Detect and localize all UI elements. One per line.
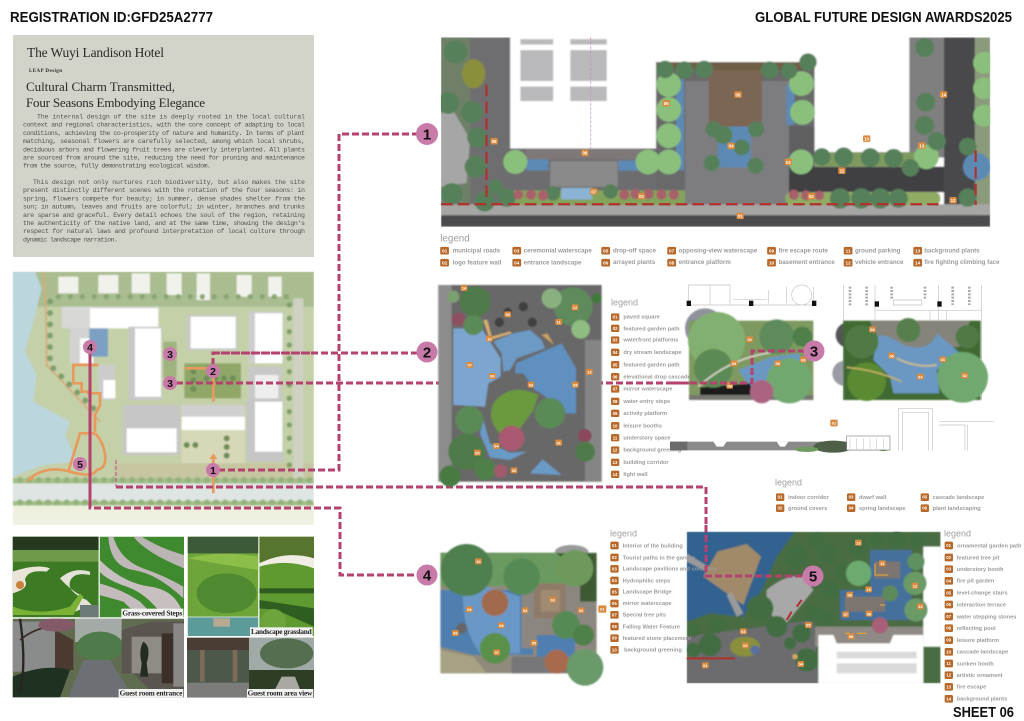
markers: plan 5 numbers xyxy=(702,540,924,668)
markers: plan 3 numbers: 06 xyxy=(889,353,895,358)
route: orange path xyxy=(30,365,213,493)
legend: plan 1: 07 xyxy=(669,248,675,254)
legend: plan 2: 02 xyxy=(613,326,618,331)
legend: plan 2: leisure booths xyxy=(623,423,662,429)
legend: plan 4: 08 xyxy=(612,624,617,629)
legend: plan 1: entrance landscape xyxy=(524,260,582,267)
legend: plan 5: 09 xyxy=(946,638,952,643)
markers: plan 5 numbers: 03 xyxy=(741,629,746,634)
markers: plan 3 numbers: 02 xyxy=(747,337,753,342)
markers: plan 2 numbers: 12 xyxy=(573,305,578,310)
markers: plan 1 numbers: 10 xyxy=(864,136,870,141)
legend: plan 2: 10 xyxy=(613,423,618,428)
legend: plan 4: featured stone placement xyxy=(623,636,691,642)
markers: plan 5 numbers: 09 xyxy=(847,592,853,597)
legend: plan 5 xyxy=(944,529,1022,703)
legend: plan 4: 10 xyxy=(612,647,617,652)
markers: plan 2 numbers: 01 xyxy=(556,440,562,445)
photo: landscape grassland xyxy=(259,537,314,636)
legend: plan 4: 02 xyxy=(612,555,617,560)
markers: plan 4 numbers: 01 xyxy=(600,607,605,612)
panel: project description: are sparse and graceful. Every detail echoes the soul of the region, retaining xyxy=(23,212,305,219)
callout: site plan 4: 4 xyxy=(87,342,93,354)
legend: plan 1: logo feature wall xyxy=(453,260,502,267)
connector overlay across plan 5 xyxy=(706,525,808,576)
panel: project description: The Wuyi Landison Hotel xyxy=(27,45,164,60)
legend: plan 1: arrayed plants xyxy=(613,259,656,266)
legend: plan 1: 11 xyxy=(846,248,851,254)
legend: plan 5: legend xyxy=(944,529,971,539)
callout: site plan 1 xyxy=(206,463,220,477)
legend: plan 1: 13 xyxy=(915,248,921,254)
markers: plan 1 numbers: 02 xyxy=(809,194,814,199)
legend: plan 5: artistic ornament xyxy=(957,673,1003,679)
legend: plan 3: indoor corridor xyxy=(788,495,830,501)
legend: plan 1: fire escape route xyxy=(778,248,829,255)
legend: plan 5: 01 xyxy=(946,543,952,548)
callout: site plan 5 xyxy=(73,457,87,471)
panel: project description: Four Seasons Embodying Elegance xyxy=(26,95,205,110)
legend: plan 5: 10 xyxy=(946,649,952,654)
markers: plan 4 numbers: 09 xyxy=(453,631,458,636)
markers: plan 4 numbers: 07 xyxy=(494,650,500,655)
markers: plan 2 numbers: 14 xyxy=(462,286,467,291)
panel: project description: present distinctly different scenes with the rotation of the four seasons: in xyxy=(23,187,305,194)
markers: plan 3 numbers: 06 xyxy=(801,357,806,362)
caption: guest room area view: Guest room area view xyxy=(248,688,313,697)
markers: plan 5 numbers: 13 xyxy=(856,540,861,545)
panel: project description: LEAP Design xyxy=(29,69,62,74)
markers: plan 5 numbers: 10 xyxy=(866,587,872,592)
markers: plan 5 numbers: 02 xyxy=(743,643,748,648)
sheet number: SHEET 06 xyxy=(953,704,1014,721)
legend: plan 3 xyxy=(775,478,984,512)
legend: plan 2: featured garden path xyxy=(623,362,680,368)
markers: plan 1 numbers: 04 xyxy=(729,144,734,149)
markers: plan 1 numbers: 13 xyxy=(919,143,925,148)
callout: site plan 2: 2 xyxy=(210,366,216,378)
legend: plan 1: ground parking xyxy=(855,248,901,255)
legend: plan 5: 11 xyxy=(946,661,952,666)
markers: plan 3 numbers xyxy=(726,326,968,426)
markers: plan 2 numbers: 11 xyxy=(557,320,562,325)
legend: plan 2: 08 xyxy=(613,399,618,404)
legend: plan 2: 07 xyxy=(613,387,618,392)
markers: plan 5 numbers: 12 xyxy=(913,583,918,588)
legend: plan 1: legend xyxy=(440,233,470,244)
legend: plan 4: 05 xyxy=(612,589,617,594)
legend: plan 5: cascade landscape xyxy=(957,650,1008,656)
legend: plan 1: 10 xyxy=(769,260,775,266)
legend: plan 2: waterfront platforms xyxy=(622,338,678,344)
markers: plan 2 numbers: 08 xyxy=(573,382,578,387)
legend: plan 5: interaction terrace xyxy=(957,602,1006,608)
legend: plan 2: activity platform xyxy=(623,411,667,417)
legend: plan 3: dwarf wall xyxy=(859,495,887,501)
legend: plan 5: level-change stairs xyxy=(957,591,1008,597)
markers: plan 4 numbers: 06 xyxy=(499,623,504,628)
legend: plan 5: background plants xyxy=(957,696,1007,702)
legend: plan 1: basement entrance xyxy=(778,259,835,266)
legend: plan 1: drop-off space xyxy=(613,248,657,255)
callout: main 3 xyxy=(804,340,824,362)
legend: plan 5: 02 xyxy=(946,555,952,560)
legend: plan 4: legend xyxy=(610,529,637,539)
markers: plan 3 numbers: 06 xyxy=(775,361,781,366)
legend: plan 1: 09 xyxy=(769,248,775,254)
panel: project description: Cultural Charm Transmitted, xyxy=(26,79,175,94)
panel: project description: deciduous arbors and flowering fruit trees are cleverly interplanted. All plants xyxy=(23,146,305,153)
legend: plan 3: 06 xyxy=(922,506,928,511)
legend: plan 4: 07 xyxy=(612,612,617,617)
markers: plan 2 numbers: 05 xyxy=(475,450,480,455)
legend: plan 1: 14 xyxy=(915,260,921,266)
legend: plan 5: 03 xyxy=(946,567,952,572)
markers: plan 2 numbers: 09 xyxy=(505,312,511,317)
markers: plan 4 numbers: 02 xyxy=(579,608,584,613)
legend: plan 5: reflecting pool xyxy=(957,626,996,632)
legend: plan 2: 11 xyxy=(613,435,618,440)
panel: project description: from the source, fully demonstrating ecological wisdom. xyxy=(23,163,211,170)
markers: plan 2 numbers: 06 xyxy=(490,374,495,379)
callout: site plan 2 xyxy=(206,364,220,378)
header: registration id: REGISTRATION ID:GFD25A2777 xyxy=(10,9,213,26)
markers: plan 1 numbers: 09 xyxy=(492,139,497,144)
legend: plan 5: 13 xyxy=(946,684,952,689)
callout: main 5 xyxy=(802,566,824,586)
legend: plan 2: 05 xyxy=(613,362,618,367)
legend: plan 4: Landscape Bridge xyxy=(623,590,672,596)
markers: plan 3 numbers: 01 xyxy=(832,421,837,426)
markers: plan 4 numbers xyxy=(452,558,606,655)
legend: plan 3: ground covers xyxy=(788,506,827,512)
callout: main 1 xyxy=(416,123,438,145)
legend: plan 1: fire fighting climbing face xyxy=(924,259,1000,266)
panel: project description: dynamic landscape narration. xyxy=(23,236,118,243)
markers: plan 2 numbers: 10 xyxy=(487,336,492,341)
callout: main 1: 1 xyxy=(423,126,431,144)
markers: plan 1 numbers: 01 xyxy=(738,214,743,219)
panel: project description: sun; in autumn, leaves and fruits are colorful; in winter, branches and trunks xyxy=(23,204,305,211)
legend: plan 2: 06 xyxy=(613,374,618,379)
panel: project description: spring, flowers compete for beauty; in summer, dense shades shelter from the xyxy=(23,195,305,202)
legend: plan 2: paved square xyxy=(623,315,660,321)
legend: plan 4: Interior of the building xyxy=(623,543,683,549)
legend: plan 1: 08 xyxy=(669,260,675,266)
legend: plan 1: 06 xyxy=(603,260,609,266)
legend: plan 2: 14 xyxy=(613,472,618,477)
legend: plan 2: 09 xyxy=(613,411,618,416)
legend: plan 1: 12 xyxy=(845,260,851,266)
legend: plan 3: 05 xyxy=(922,495,928,500)
legend: plan 5: 07 xyxy=(946,614,952,619)
panel: project description xyxy=(13,35,314,257)
markers: plan 3 numbers: 08 xyxy=(870,327,875,332)
drawing: architectural linework above plan 3 xyxy=(687,285,982,400)
markers: plan 2 numbers: 03 xyxy=(529,382,534,387)
legend: plan 5: featured tree pit xyxy=(957,555,1000,561)
legend: plan 5: sunken booth xyxy=(957,661,994,667)
panel: project description: conditions, achieving the co-prosperity of nature and humanity. In terms of plant xyxy=(23,130,305,137)
legend: plan 5: 04 xyxy=(946,578,952,583)
markers: plan 1 numbers: 12 xyxy=(951,198,956,203)
markers: plan 1 numbers: 07 xyxy=(591,189,597,194)
legend: plan 4: 01 xyxy=(612,543,617,548)
markers: plan 5 numbers: 06 xyxy=(849,634,854,639)
legend: plan 2: 12 xyxy=(613,448,618,453)
callout: site plan 4 xyxy=(83,340,97,354)
markers: plan 5 numbers: 04 xyxy=(798,662,804,667)
callout: main 2 xyxy=(416,342,438,362)
legend: plan 1: entrance platform xyxy=(679,259,731,266)
panel: project description: are sourced from around the site, reducing the need for pruning and maintenance xyxy=(23,154,305,162)
callout: main 5: 5 xyxy=(809,568,817,586)
markers: plan 5 numbers: 14 xyxy=(918,604,923,609)
caption: grass-covered steps: Grass-covered Steps xyxy=(122,608,182,617)
markers: plan 1 numbers: 06 xyxy=(664,101,669,106)
panel: project description: matching, seasonal flowers are carefully selected, among which local shrubs, xyxy=(23,138,305,145)
legend: plan 2: featured garden path xyxy=(623,326,680,332)
legend: plan 2: 04 xyxy=(613,350,618,355)
legend: plan 2: legend xyxy=(611,298,638,308)
markers: plan 2 numbers xyxy=(461,285,593,473)
caption: guest room entrance: Guest room entrance xyxy=(120,688,183,697)
markers: plan 4 numbers: 03 xyxy=(550,597,556,602)
markers: plan 1 numbers xyxy=(491,91,957,219)
markers: plan 1 numbers: 11 xyxy=(840,169,845,174)
legend: plan 5: 06 xyxy=(946,602,952,607)
markers: plan 3 numbers: 03 xyxy=(732,361,737,366)
legend: plan 2: building corridor xyxy=(623,460,669,466)
markers: plan 1 numbers: 03 xyxy=(786,160,791,165)
photo: guest room entrance xyxy=(13,618,184,697)
callout: site plan 3 lower xyxy=(163,376,177,390)
photo: lawn with curved wall xyxy=(13,537,100,618)
panel: plan 4 water garden xyxy=(440,544,606,686)
markers: plan 5 numbers: 11 xyxy=(880,561,885,566)
legend: plan 5: leisure platform xyxy=(957,638,999,644)
panel: project description: respect for natural laws and profound interpretation of local culture through xyxy=(23,228,305,235)
legend: plan 3: legend xyxy=(775,478,802,488)
legend: plan 1: vehicle entrance xyxy=(855,259,904,266)
legend: plan 1: background plants xyxy=(924,248,980,255)
legend: plan 4: 03 xyxy=(612,566,617,571)
connector lines behind plan 2 xyxy=(90,134,808,576)
markers: plan 3 numbers: 09 xyxy=(727,383,733,388)
legend: plan 4: Landscape pavilions and corridors xyxy=(623,567,716,573)
legend: plan 4: Hydrophilic steps xyxy=(623,578,670,584)
markers: plan 1 numbers: 14 xyxy=(941,92,947,97)
legend: plan 2: water-entry steps xyxy=(622,399,670,405)
markers: plan 5 numbers: 01 xyxy=(703,663,708,668)
section drawing xyxy=(670,408,994,453)
legend: plan 1 xyxy=(440,233,1000,267)
legend: plan 1: ceremonial waterscape xyxy=(524,248,592,255)
legend: plan 1: 03 xyxy=(514,248,520,254)
legend: plan 1: 01 xyxy=(442,248,448,254)
callout: site plan 5: 5 xyxy=(77,459,83,471)
legend: plan 5: fire escape xyxy=(957,685,986,691)
legend: plan 3: 04 xyxy=(849,506,854,511)
callout: main 2: 2 xyxy=(423,344,431,362)
markers: plan 1 numbers: 08 xyxy=(582,151,588,156)
legend: plan 2: 03 xyxy=(613,338,618,343)
legend: plan 3: spring landscape xyxy=(859,506,906,512)
legend: plan 5: understory booth xyxy=(957,567,1004,573)
callout: site plan 1: 1 xyxy=(210,465,216,477)
markers: plan 3 numbers: 04 xyxy=(918,374,923,379)
markers: plan 1 numbers: 02 xyxy=(639,194,644,199)
legend: plan 5: 14 xyxy=(946,696,952,701)
legend: plan 2 xyxy=(611,298,691,478)
legend: plan 4: Special tree pits xyxy=(623,613,666,619)
markers: plan 5 numbers: 08 xyxy=(867,611,872,616)
legend: plan 2: mirror waterscape xyxy=(623,387,672,393)
legend: plan 3: cascade landscape xyxy=(933,495,984,501)
panel: project description: The internal design of the site is deeply rooted in the local cultural xyxy=(37,114,305,120)
markers: plan 5 numbers: 07 xyxy=(843,612,849,617)
markers: plan 4 numbers: 06 xyxy=(467,607,472,612)
panel: plan 1 entrance xyxy=(437,37,1000,267)
legend: plan 1: 02 xyxy=(442,260,448,266)
panel: plan 2 courtyard xyxy=(438,285,602,487)
panel: plan 5 lakeside garden xyxy=(686,531,941,683)
legend: plan 5: 05 xyxy=(946,590,952,595)
markers: plan 4 numbers: 05 xyxy=(532,641,537,646)
legend: plan 2: light wall xyxy=(623,472,648,478)
legend: plan 4: Falling Water Feature xyxy=(623,624,680,630)
legend: plan 2: dry stream landscape xyxy=(623,350,682,356)
photo: guest room area view xyxy=(187,638,314,698)
markers: plan 2 numbers: 07 xyxy=(467,363,473,368)
legend: plan 3: 03 xyxy=(849,495,854,500)
panel: project description: the authenticity of the native land, and at the same time, showing the design's xyxy=(23,220,305,227)
caption: landscape grassland: Landscape grassland xyxy=(251,627,312,636)
callout: main 4 xyxy=(416,564,438,586)
panel: project description: This design not only nurtures rich biodiversity, but also makes the site xyxy=(33,179,305,186)
legend: plan 3: 02 xyxy=(778,506,783,511)
legend: plan 5: fire pit garden xyxy=(957,579,995,585)
legend: plan 2: elevational drop cascade xyxy=(623,374,691,380)
legend: plan 5: 08 xyxy=(946,626,952,631)
legend: plan 5: ornamental garden path xyxy=(957,544,1022,550)
callout: main 4: 4 xyxy=(423,568,432,584)
markers: plan 4 numbers: 10 xyxy=(476,559,481,564)
legend: plan 4: 06 xyxy=(612,601,617,606)
site plan connector overlay xyxy=(90,353,314,508)
markers: plan 2 numbers: 04 xyxy=(494,444,499,449)
callout: site plan 3 upper xyxy=(163,347,177,361)
panel: project description: context and regional characteristics, with the core concept of adapting to local xyxy=(23,122,305,129)
legend: plan 4: background greening xyxy=(624,648,682,654)
legend: plan 2: 13 xyxy=(613,460,618,465)
callout: site plan 3 lower: 3 xyxy=(167,378,173,390)
legend: plan 1: opposing-view waterscape xyxy=(679,248,758,255)
legend: plan 4: 04 xyxy=(612,578,617,583)
photo: grassy slopes xyxy=(188,537,258,636)
markers: plan 3 numbers: 02 xyxy=(962,373,968,378)
photo: grass steps aerial xyxy=(100,537,184,617)
legend: plan 4: mirror waterscape xyxy=(623,601,672,607)
legend: plan 2: background greening xyxy=(623,448,682,454)
legend: plan 1: 05 xyxy=(603,248,609,254)
legend: plan 3: 01 xyxy=(778,495,783,500)
panel: photo collage xyxy=(13,537,314,698)
legend: plan 3: plant landscaping xyxy=(933,506,981,512)
panel: site plan xyxy=(13,272,314,525)
legend: plan 1: 04 xyxy=(514,260,520,266)
callout: main 3: 3 xyxy=(810,344,818,360)
markers: plan 1 numbers: 05 xyxy=(736,92,741,97)
legend: plan 4: Tourist paths in the garden xyxy=(623,556,696,562)
legend: plan 4: 09 xyxy=(612,636,617,641)
legend: plan 1: municipal roads xyxy=(453,248,501,255)
legend: plan 5: 12 xyxy=(946,673,952,678)
legend: plan 2: 01 xyxy=(613,315,618,320)
legend: plan 4 xyxy=(610,529,716,654)
callout: site plan 3 upper: 3 xyxy=(167,349,173,361)
connector overlay across plan 3 xyxy=(670,351,808,383)
legend: plan 2: understory space xyxy=(623,435,670,441)
legend: plan 5: water stepping stones xyxy=(956,614,1016,620)
markers: plan 5 numbers: 05 xyxy=(806,623,811,628)
panel: plan 3 water gardens and section xyxy=(670,285,994,453)
markers: plan 3 numbers: 03 xyxy=(940,357,946,362)
markers: plan 4 numbers: 04 xyxy=(523,608,528,613)
markers: plan 2 numbers: 02 xyxy=(512,468,517,473)
markers: plan 2 numbers: 13 xyxy=(587,370,592,375)
